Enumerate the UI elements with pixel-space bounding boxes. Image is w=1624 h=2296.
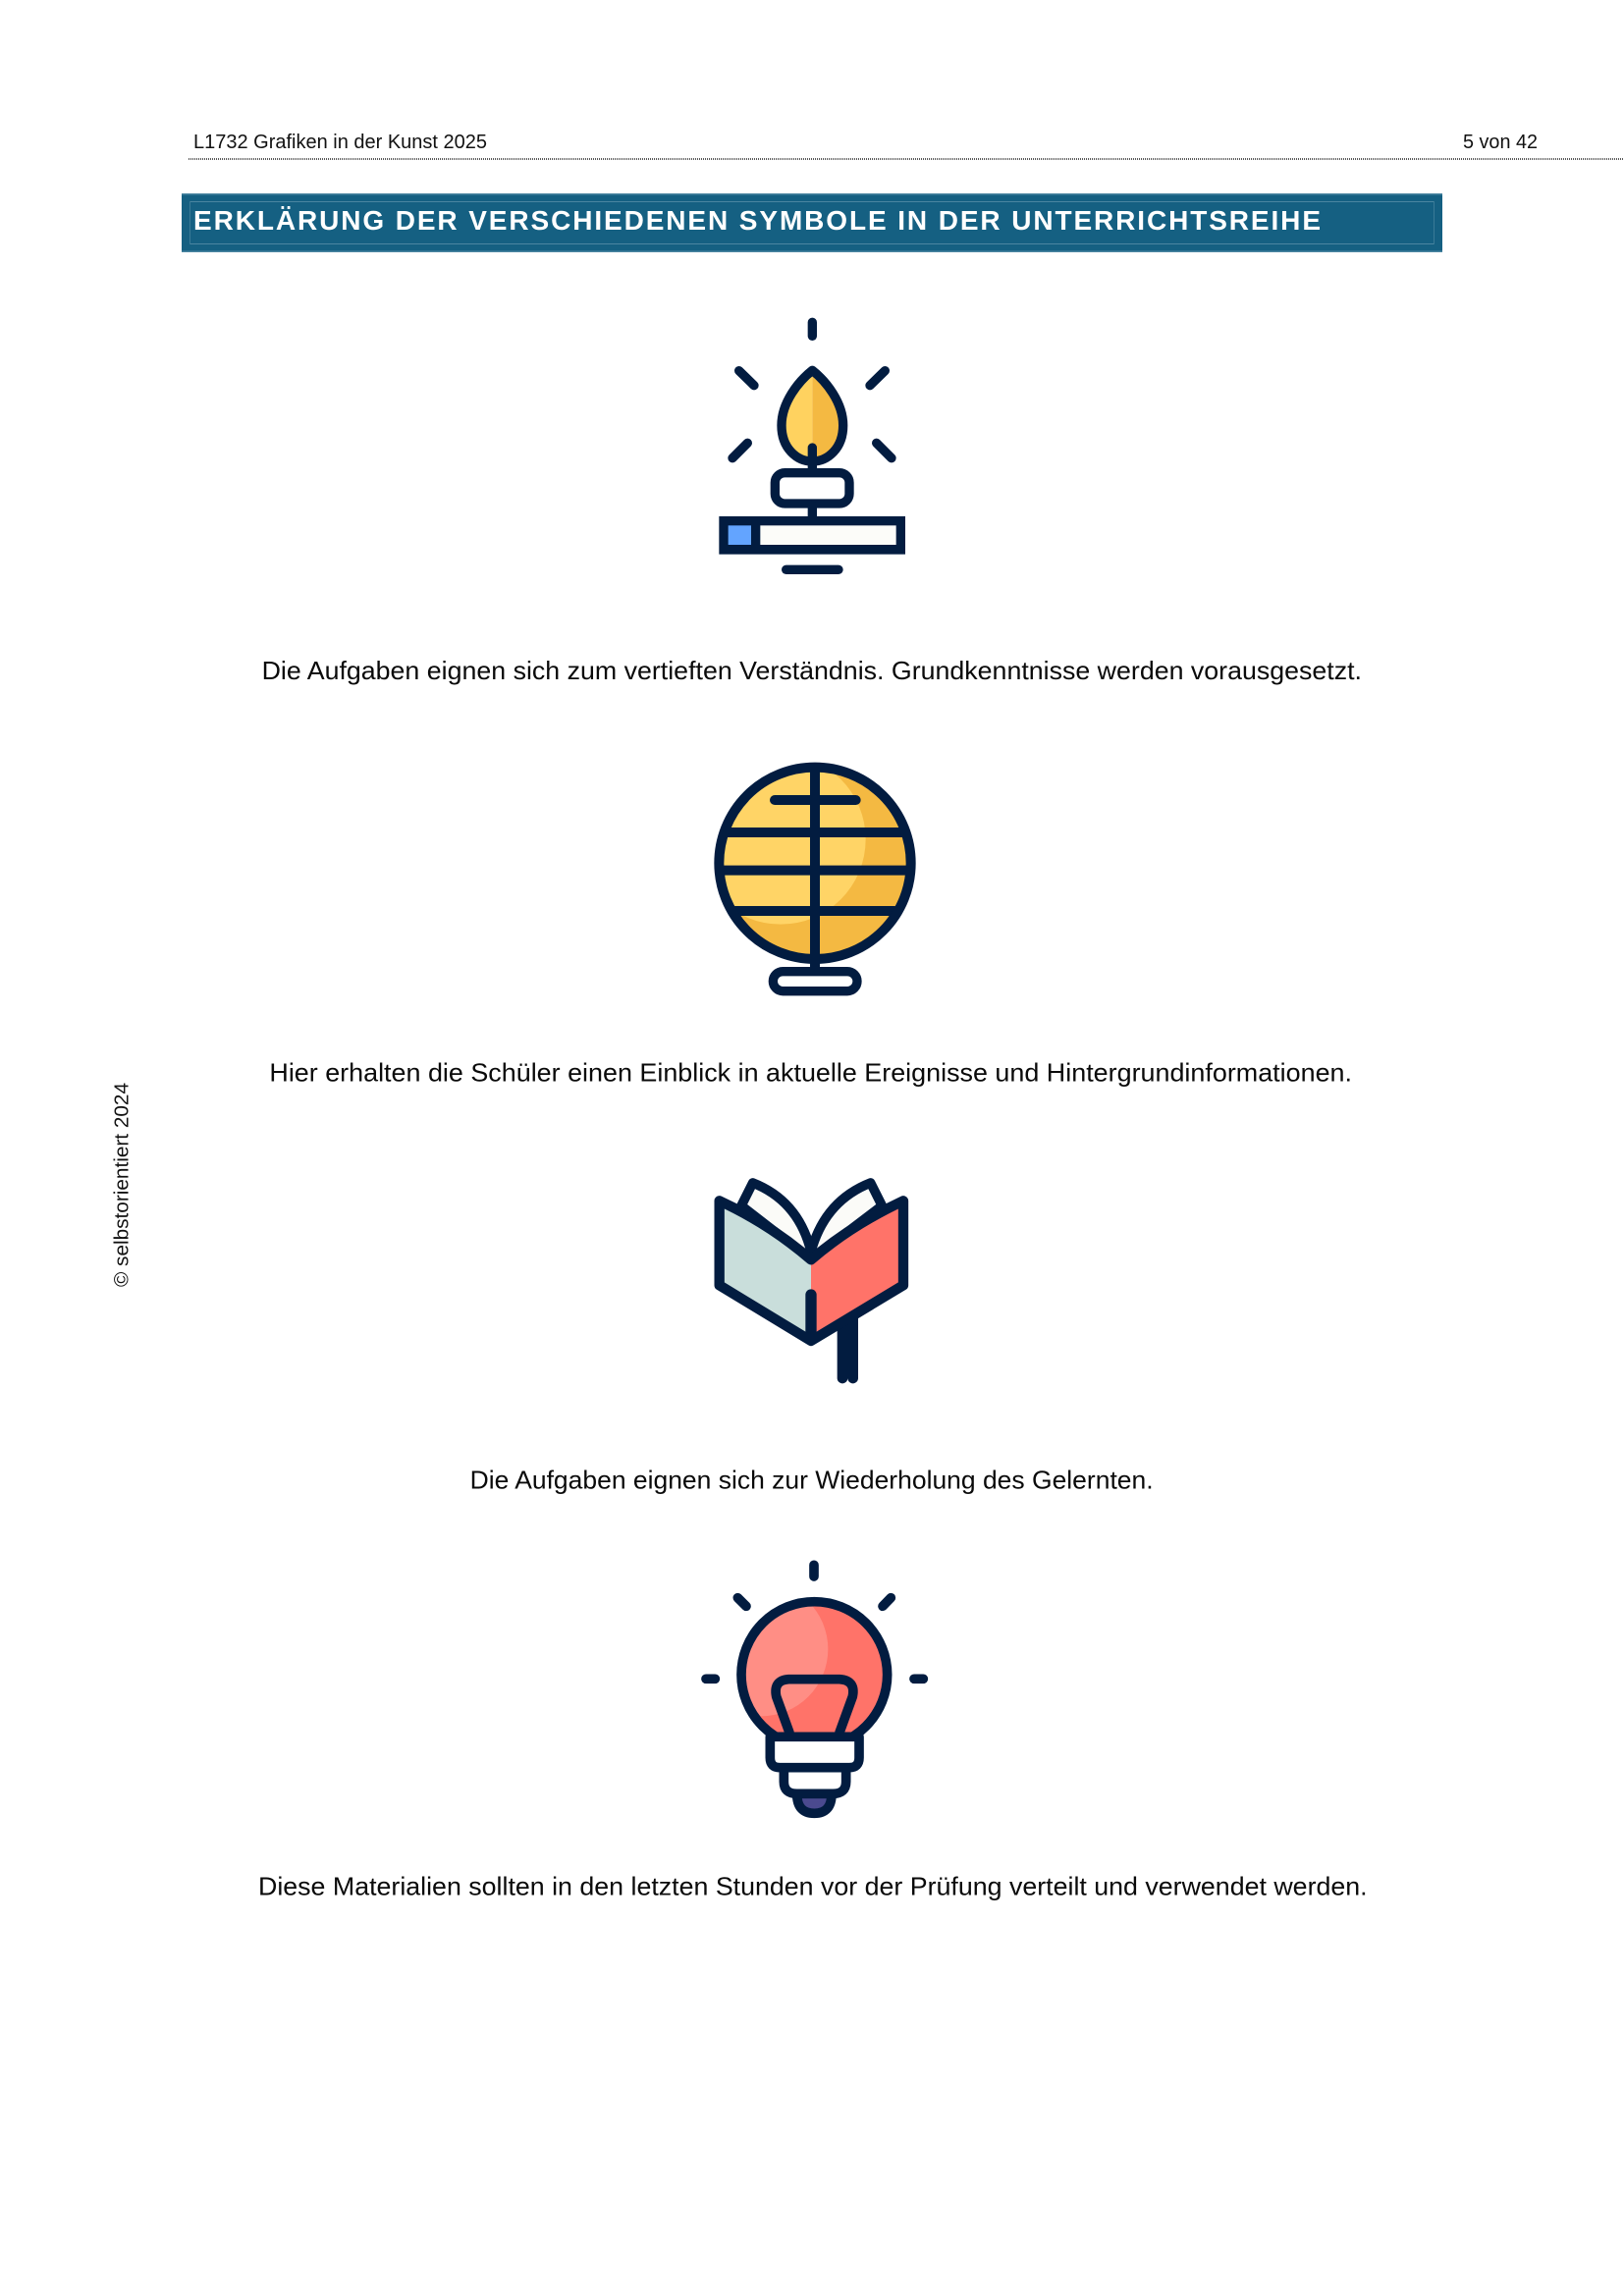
lower base xyxy=(784,1767,846,1793)
document reference: L1732 Grafiken in der Kunst 2025 xyxy=(193,132,487,153)
bookmark xyxy=(838,1315,858,1383)
copyright note: © selbstorientiert 2024 xyxy=(112,1083,134,1287)
icon: open book xyxy=(720,1183,903,1383)
holder bar xyxy=(719,516,905,555)
stem xyxy=(798,506,826,518)
stand xyxy=(773,972,857,991)
globe fill xyxy=(724,772,906,954)
light rays xyxy=(732,322,892,458)
filament xyxy=(776,1680,853,1733)
page header xyxy=(189,132,1624,159)
description: candle: Die Aufgaben eignen sich zum vertieften Verständnis. Grundkenntnisse werden vorausgesetzt. xyxy=(262,656,1362,685)
page number: 5 von 42 xyxy=(1463,132,1538,153)
spine xyxy=(794,1295,828,1338)
description: book: Die Aufgaben eignen sich zur Wiederholung des Gelernten. xyxy=(470,1466,1154,1495)
icon: globe xyxy=(695,754,913,991)
icon: light bulb xyxy=(694,1565,923,1813)
tip xyxy=(797,1793,832,1813)
globe outline xyxy=(719,768,911,959)
base line xyxy=(786,556,839,583)
title banner xyxy=(182,193,1442,252)
left page xyxy=(720,1201,811,1341)
description: globe: Hier erhalten die Schüler einen Einblick in aktuelle Ereignisse und Hintergrundinformationen. xyxy=(269,1058,1352,1088)
candle body xyxy=(775,473,849,504)
rays xyxy=(706,1565,923,1679)
short line xyxy=(775,785,856,815)
icon: candle xyxy=(719,322,905,569)
inner pages xyxy=(741,1183,882,1259)
cover outline xyxy=(720,1201,903,1341)
glass outline xyxy=(741,1602,888,1747)
grid lines xyxy=(719,766,911,969)
description: bulb: Diese Materialien sollten in den letzten Stunden vor der Prüfung verteilt und verwendet werden. xyxy=(258,1872,1368,1901)
glass fill xyxy=(746,1606,883,1732)
flame xyxy=(782,370,843,468)
right page xyxy=(811,1201,903,1341)
upper base xyxy=(770,1736,859,1768)
title: ERKLÄRUNG DER VERSCHIEDENEN SYMBOLE IN DER UNTERRICHTSREIHE xyxy=(193,205,1321,236)
